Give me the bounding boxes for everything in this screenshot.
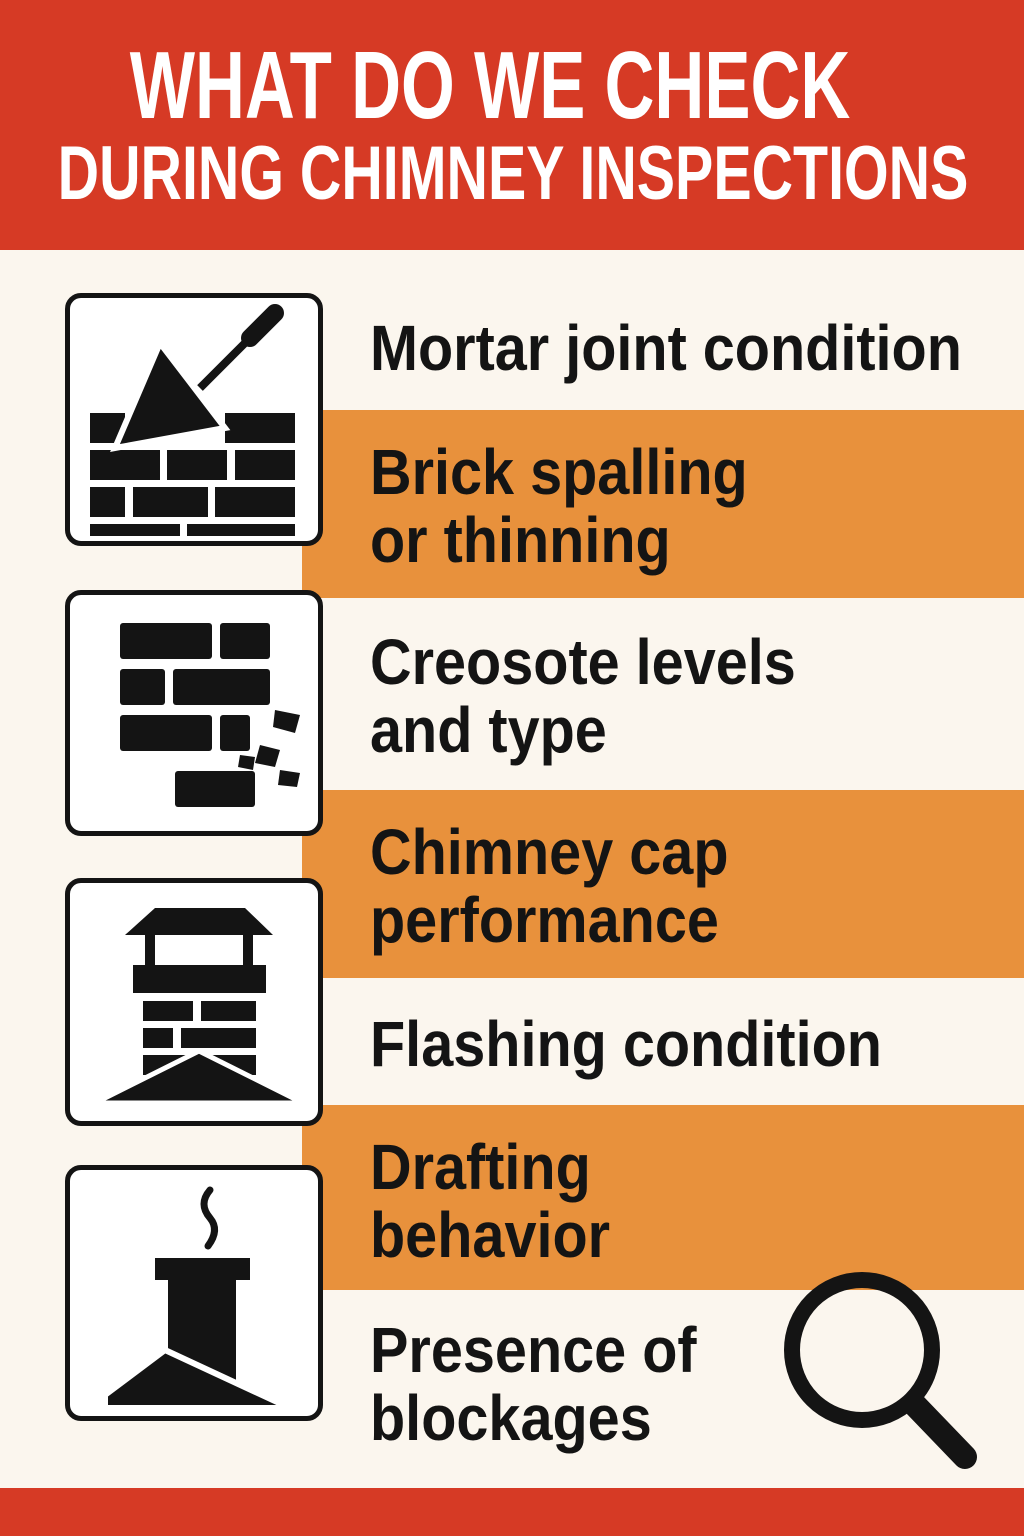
text: brick spalling: Brick spalling [370,436,748,508]
band: chimney cap [302,790,1024,978]
icon: crumbling bricks [65,590,323,836]
text: drafting: Drafting [370,1131,591,1203]
text: drafting [370,1131,610,1271]
icon: chimney with cap [65,878,323,1126]
icon: trowel and bricks [65,293,323,546]
band: drafting [302,1105,1024,1290]
title: DURING CHIMNEY INSPECTIONS [58,131,968,216]
text: creosote: Creosote levels [370,626,796,698]
text: mortar: Mortar joint condition [370,312,962,384]
text: blockages [370,1314,697,1454]
text: chimney cap [370,816,729,956]
text: chimney cap: performance [370,884,719,956]
bottom bar [0,1488,1024,1536]
header [0,0,1024,250]
title: WHAT DO WE CHECK [130,32,850,139]
text: brick spalling [370,436,748,576]
text: blockages: Presence of [370,1314,697,1386]
text: creosote: and type [370,694,607,766]
text: chimney cap: Chimney cap [370,816,729,888]
title [58,32,968,216]
text: brick spalling: or thinning [370,504,671,576]
band: brick spalling [302,410,1024,598]
icon: chimney with smoke [65,1165,323,1421]
text: drafting: behavior [370,1199,610,1271]
text: flashing: Flashing condition [370,1008,882,1080]
text: blockages: blockages [370,1382,652,1454]
icon: magnifier [784,1272,977,1469]
text: creosote [370,626,796,766]
